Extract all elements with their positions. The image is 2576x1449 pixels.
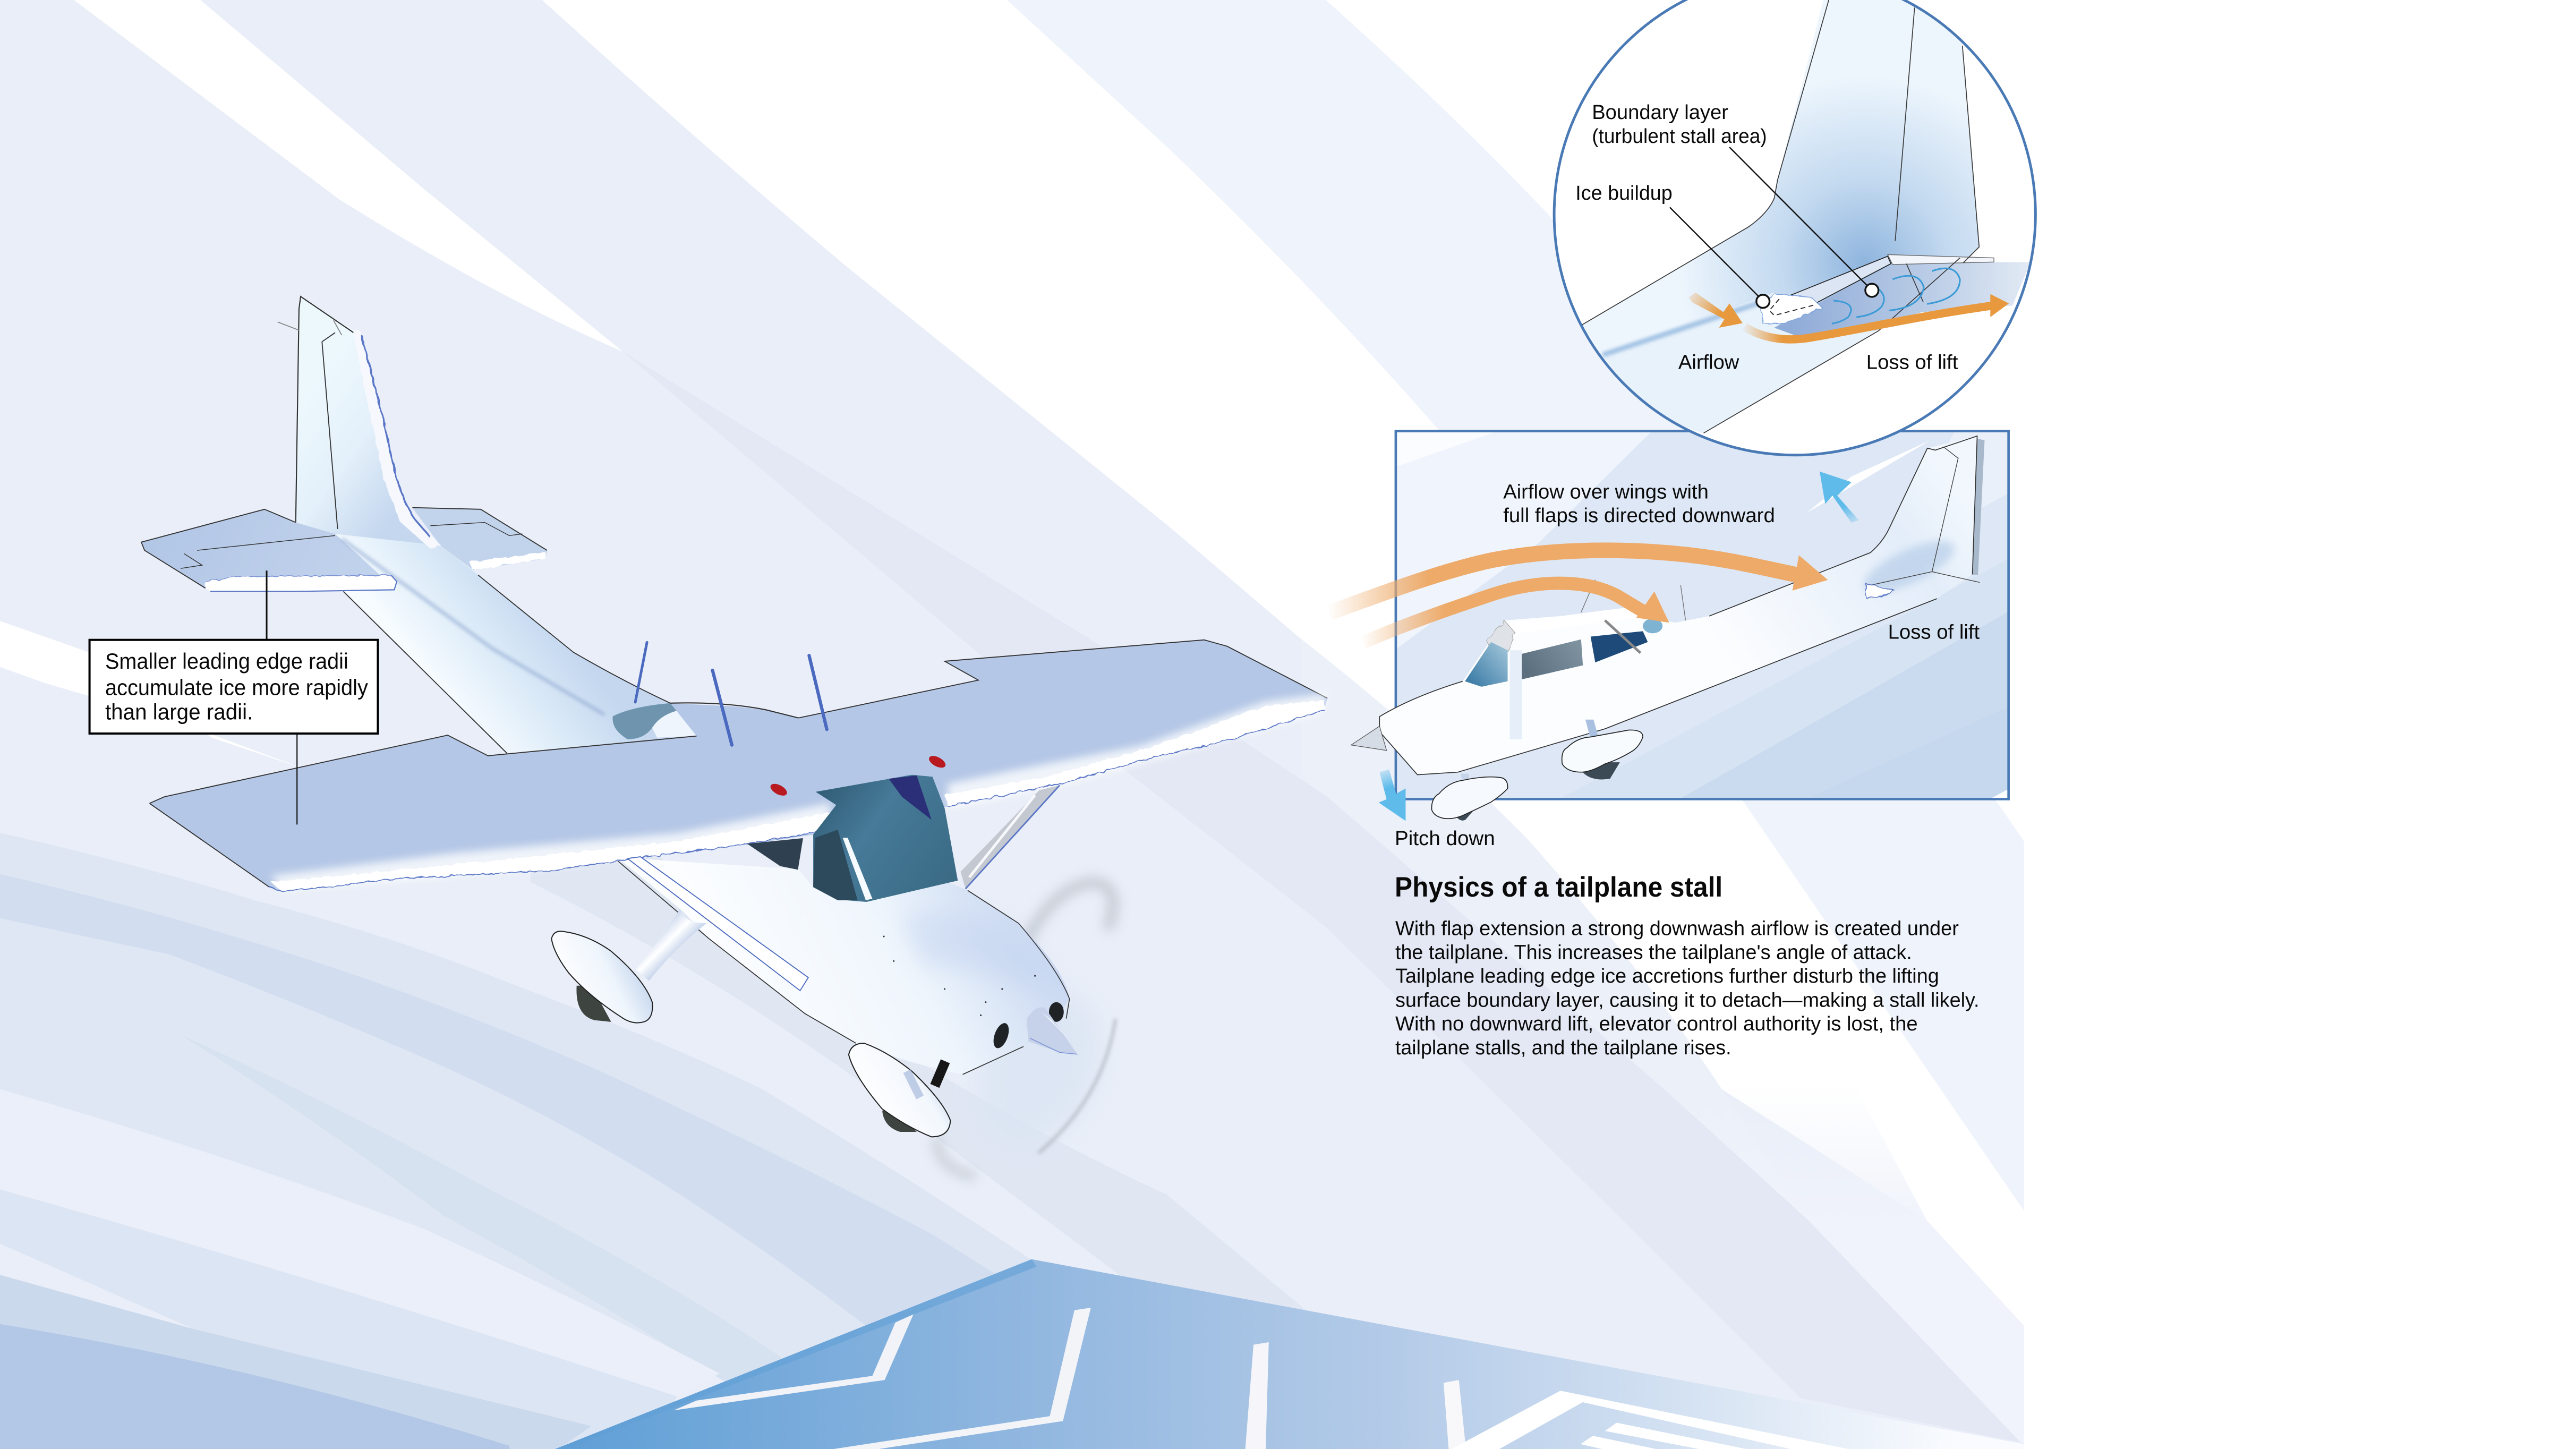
circle frame [1554, 0, 2035, 455]
tail fuselage [335, 534, 723, 754]
antennas [1581, 580, 1686, 620]
nose gear [1432, 774, 1508, 821]
panel frame [1396, 431, 2009, 799]
callout: leading edge radii: accumulate ice more rapidly [105, 675, 368, 700]
ice on small wing [1487, 621, 1515, 652]
fuselage outlines [1379, 436, 1977, 775]
heading: physics of a tailplane stall: Physics of a tailplane stall [1395, 872, 1722, 903]
detail labels: (turbulent stall area) [1592, 125, 1767, 147]
vertical fin [278, 296, 441, 545]
arrow: tail rises [1820, 472, 1859, 523]
panel labels: side view: full flaps is directed downward [1503, 504, 1775, 526]
panel backdrop [1395, 430, 2009, 800]
ice on wing leading edge: right [945, 693, 1327, 808]
arrow: pitch down [1379, 769, 1405, 821]
fin and fuselage [1583, 0, 1980, 374]
spinner and cowl intakes [991, 1002, 1077, 1054]
text block: explanation: tailplane stalls, and the tailplane rises. [1395, 1036, 1731, 1059]
detail labels: Boundary layer [1592, 101, 1728, 123]
crease [1603, 302, 1761, 355]
small airplane side view [1351, 436, 1984, 821]
circle backing [1555, 0, 2035, 454]
callout: leading edge radii: Smaller leading edge radii [105, 649, 348, 674]
propeller blur [936, 882, 1122, 1177]
panel labels: side view: Pitch down [1395, 827, 1495, 849]
callout: leading edge radii: than large radii. [105, 700, 253, 724]
rear cabin glass [1643, 619, 1662, 633]
wing [1505, 611, 1646, 629]
left wing strut [628, 857, 808, 991]
text block: explanation: the tailplane. This increases the tailplane's angle of attack. [1395, 941, 1912, 963]
panel labels: side view: Airflow over wings with [1503, 480, 1709, 502]
rear window [1591, 631, 1648, 662]
detail labels: Loss of lift [1866, 351, 1958, 373]
ice on wing leading edge: left [269, 803, 838, 892]
windshield [813, 775, 958, 902]
text block: explanation: With flap extension a strong downwash airflow is created under [1395, 917, 1959, 940]
arrow: lower airflow [1363, 583, 1669, 642]
tailplane top [1790, 256, 1892, 303]
spinner [1351, 726, 1387, 751]
detail art [1582, 0, 2031, 434]
outlines [1582, 0, 1979, 433]
side window [747, 838, 803, 870]
main wing [149, 640, 1327, 892]
text block: explanation: surface boundary layer, causing it to detach—making a stall likely. [1395, 988, 1980, 1011]
callout: leading edge radii [90, 570, 378, 824]
cabin window [1522, 640, 1583, 679]
main landing gear [551, 908, 706, 1023]
rudder and tailplane lines [1871, 447, 1980, 585]
strut [1510, 650, 1522, 739]
background: sky rays [0, 0, 2024, 1449]
red markers [769, 754, 948, 798]
arrow: loss of lift flow [1745, 294, 2009, 339]
tailplane tip [1888, 254, 1994, 265]
rear window [612, 703, 706, 739]
arrow: upper airflow [1329, 550, 1828, 613]
detail labels: Airflow [1678, 351, 1739, 373]
arrow: airflow in [1689, 293, 1743, 328]
main gear [1562, 720, 1643, 779]
ice buildup blob [1761, 294, 1822, 323]
right wing strut [961, 785, 1060, 889]
text block: explanation: With no downward lift, elevator control authority is lost, the [1395, 1012, 1918, 1035]
tail ice [1866, 584, 1894, 598]
detail labels: Ice buildup [1575, 182, 1673, 204]
runway [555, 1259, 2024, 1449]
panel: full flaps side view [1395, 430, 2009, 800]
panel labels: side view: Loss of lift [1888, 621, 1980, 643]
ice on fin leading edge [353, 330, 441, 549]
rear strut [1605, 620, 1640, 653]
leader lines with markers [1670, 147, 1879, 308]
text block: explanation [1395, 917, 1980, 1059]
lower fuselage highlight [1656, 292, 1878, 433]
tail shading [1857, 531, 1960, 602]
fin shadow [1972, 439, 1984, 575]
underside of tailplane [1775, 262, 2031, 337]
text block: explanation: Tailplane leading edge ice accretions further disturb the lifting [1395, 965, 1939, 987]
windshield [1465, 642, 1508, 687]
panel: circular tailplane detail [1554, 0, 2035, 455]
ice on stabilizer leading edge [204, 575, 397, 591]
fuselage [1379, 436, 1977, 775]
horizontal stabilizer: right [412, 508, 547, 570]
antennas [635, 642, 827, 745]
detail labels [1575, 101, 1958, 373]
arrows: airflow over wings [1329, 550, 1828, 642]
nose landing gear [849, 1043, 950, 1137]
horizontal stabilizer: left [141, 509, 394, 588]
turbulence swirls [1832, 268, 1960, 323]
panel labels: side view [1395, 480, 1980, 849]
fuselage and cowling [618, 858, 1070, 1075]
illustration: main airplane with ice [141, 296, 1327, 1177]
